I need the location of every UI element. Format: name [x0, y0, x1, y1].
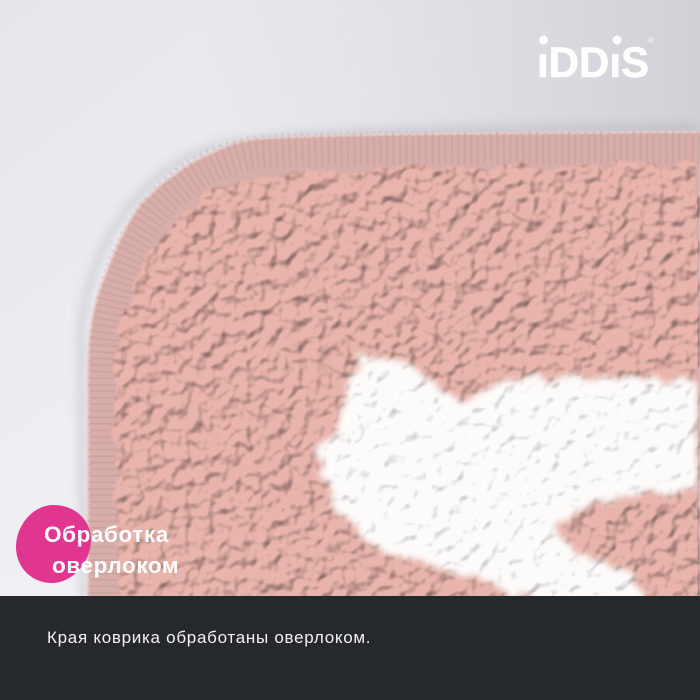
logo: iDDIS: ıDDıS [537, 39, 649, 87]
rug pile: white pattern [317, 351, 700, 610]
bottom panel [0, 596, 700, 700]
badge: pink blob with label [16, 505, 179, 583]
overlocked rug edge [88, 132, 700, 600]
badge blob [16, 505, 91, 583]
badge label: оверлоком [52, 553, 179, 578]
badge label: Обработка [44, 522, 169, 547]
rug pile: pink [114, 163, 700, 600]
caption text: Края коврика обработаны оверлоком. [47, 628, 371, 647]
registered mark: ® [648, 36, 654, 45]
rug shadow [81, 128, 700, 600]
